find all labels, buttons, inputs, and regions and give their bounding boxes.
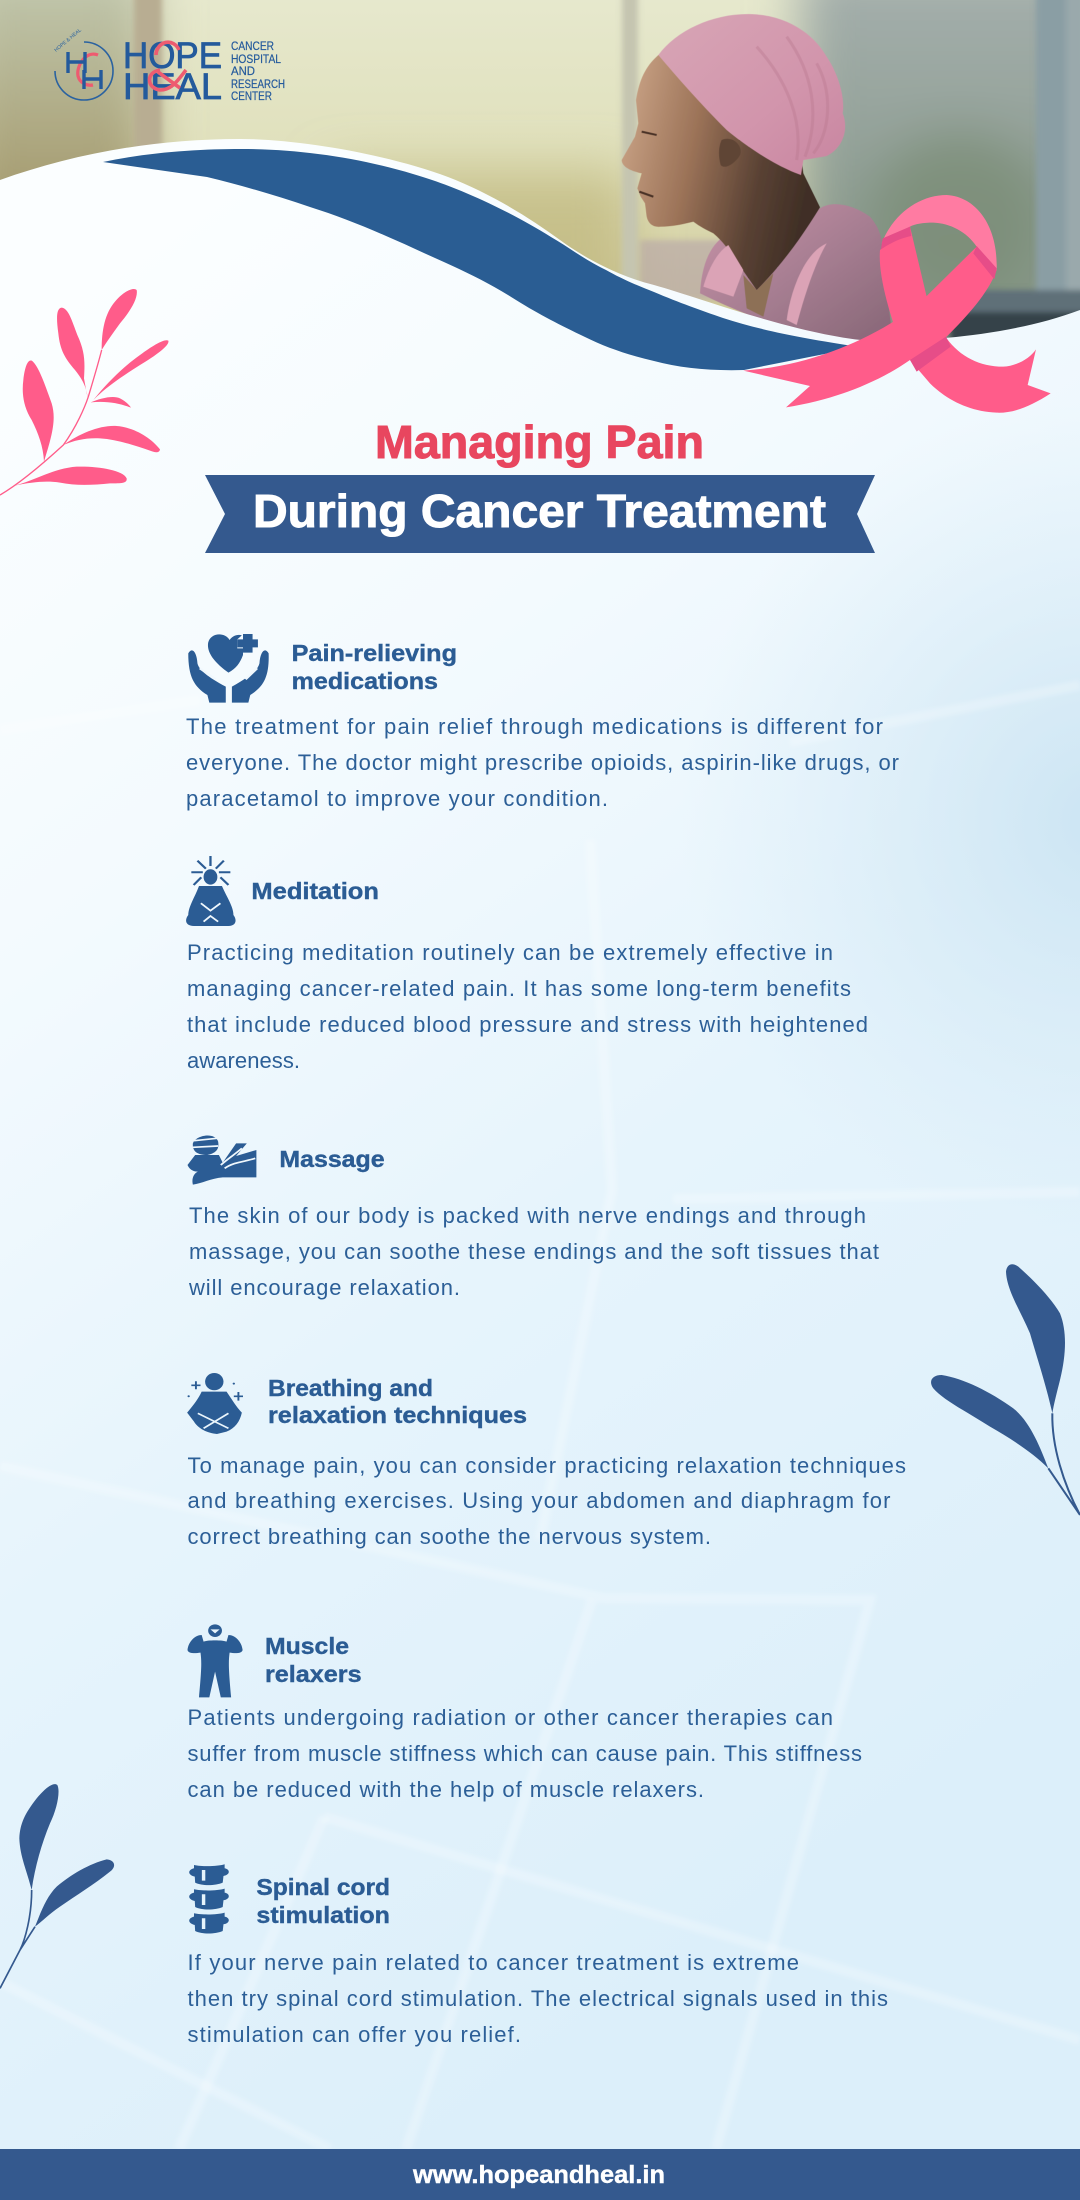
body text: To manage pain, you can consider practicing relaxation techniques [188,1453,906,1478]
icon: spine vertebrae [189,1864,229,1933]
body text: everyone. The doctor might prescribe opioids, aspirin-like drugs, or [186,750,899,775]
title: Managing Pain: Managing Pain [375,416,704,468]
icon: hands holding heart [188,634,269,703]
logo [53,27,285,107]
body text: can be reduced with the help of muscle relaxers. [188,1777,704,1802]
heading: Meditation [251,878,379,904]
decorative blue leaf left [0,1784,114,1988]
shirt highlight [703,243,827,325]
body text: then try spinal cord stimulation. The electrical signals used in this [188,1986,888,2011]
pink awareness ribbon [743,195,1051,413]
body text: managing cancer-related pain. It has some long-term benefits [187,976,851,1001]
face and neck [622,55,820,290]
heading: Spinal cord [256,1874,390,1900]
panel: meditation [186,856,868,1073]
panel: spinal cord stimulation [188,1864,888,2047]
body text [188,1705,862,1802]
body text: correct breathing can soothe the nervous system. [188,1524,711,1549]
panel: muscle relaxers: relaxers [265,1661,362,1687]
logo wordmark [123,35,222,107]
heading: Pain-relieving [292,640,457,666]
decorative blue leaf right [931,1264,1080,1515]
ribbon loop [882,195,997,270]
body text [188,1950,888,2047]
heading: Breathing and [268,1375,433,1401]
icon: cross-legged figure with sparkles [187,1373,243,1434]
icon: massage [188,1135,256,1185]
decorative pink leaf sprig [0,289,168,495]
title banner: During Cancer Treatment [253,485,826,537]
body text [186,714,899,811]
panel: pain-relieving medications [186,634,899,811]
body text: The skin of our body is packed with nerve endings and through [189,1203,866,1228]
chest [743,273,773,317]
body text: stimulation can offer you relief. [188,2022,521,2047]
panel: spinal cord stimulation: stimulation [256,1902,390,1928]
logo emblem [53,27,113,100]
logo ampersand [150,42,186,90]
footer bar [0,2149,1080,2200]
eye and lips [639,132,657,197]
body text: and breathing exercises. Using your abdomen and diaphragm for [188,1488,890,1513]
panel: breathing and relaxation: relaxation techniques [268,1402,527,1428]
body text: If your nerve pain related to cancer treatment is extreme [188,1950,799,1975]
body text [188,1453,906,1549]
logo emblem: HOPE & HEAL [53,27,83,54]
ribbon folds [881,227,997,372]
logo tagline: HOSPITAL [231,54,282,66]
heading: Massage [279,1146,385,1172]
blue wave band [103,149,860,370]
title banner [205,475,875,553]
body text [188,1203,879,1300]
panel: massage [188,1135,879,1300]
background faint streaks [0,685,1080,2149]
body text: The treatment for pain relief through medications is different for [186,714,883,739]
headscarf [658,14,845,175]
body text: paracetamol to improve your condition. [186,786,608,811]
ribbon right tail [880,227,1051,413]
body text: Practicing meditation routinely can be extremely effective in [187,940,833,965]
header photo: window background [0,0,1080,400]
logo wordmark: HEAL [123,66,222,107]
panel: pain-relieving medications: medications [292,668,438,694]
body text: Patients undergoing radiation or other cancer therapies can [188,1705,833,1730]
ear [719,139,741,167]
logo tagline: AND [231,66,255,78]
logo tagline [231,41,285,103]
body text [187,940,868,1073]
headscarf folds [757,37,828,160]
body text: awareness. [187,1048,300,1073]
logo tagline: CANCER [231,41,274,53]
icon: meditating figure with rays [186,856,236,926]
footer bar: www.hopeandheal.in [412,2161,665,2189]
icon: muscular figure [188,1624,243,1697]
body text: that include reduced blood pressure and stress with heightened [187,1012,868,1037]
woman with pink headscarf [622,14,893,343]
logo tagline: CENTER [231,91,272,103]
logo tagline: RESEARCH [231,79,285,91]
panel: breathing and relaxation [187,1373,906,1549]
panel: muscle relaxers [188,1624,862,1802]
logo wordmark: HOPE [123,35,222,76]
background tint right [660,400,1080,1240]
body text: suffer from muscle stiffness which can cause pain. This stiffness [188,1741,862,1766]
body text: massage, you can soothe these endings and the soft tissues that [189,1239,879,1264]
heading: Muscle [265,1633,349,1659]
ribbon left tail [743,247,997,407]
shirt [700,204,893,343]
body text: will encourage relaxation. [188,1275,460,1300]
